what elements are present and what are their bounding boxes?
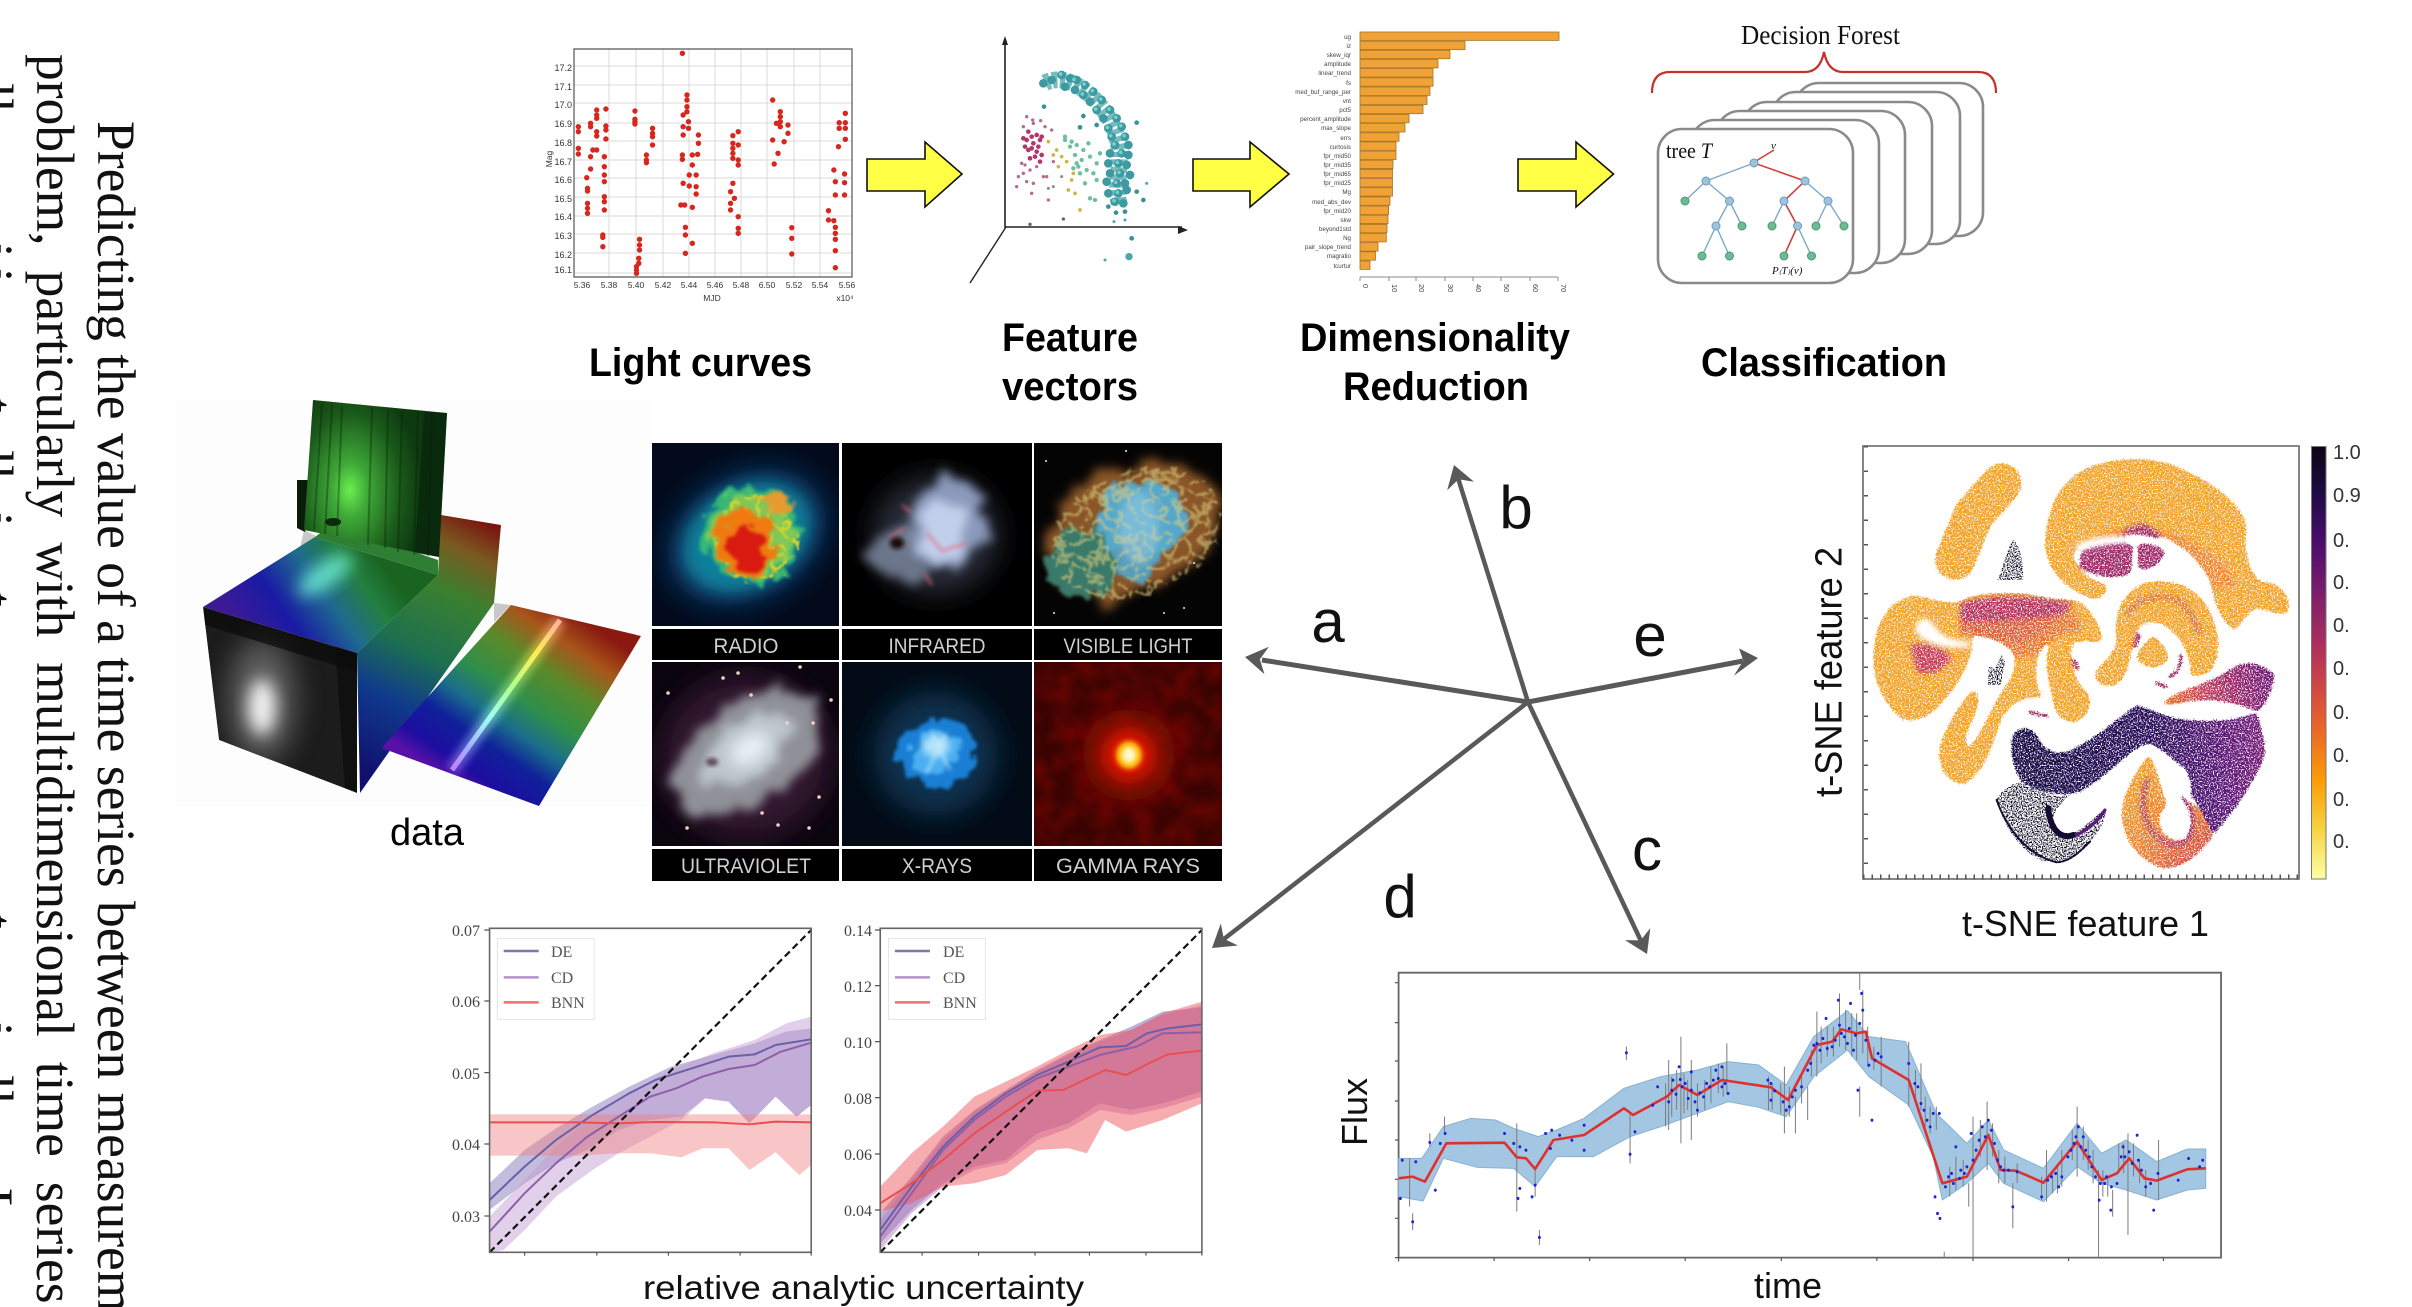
- panel: feature importance bar chart: 10: [1390, 284, 1399, 292]
- bar labels: fpr_mid25: [1323, 180, 1352, 187]
- panel: feature importance bar chart: 70: [1559, 284, 1568, 292]
- bar labels: fpr_mid65: [1323, 171, 1352, 178]
- bar labels: pct5: [1339, 107, 1352, 114]
- back dark slice: [297, 480, 313, 532]
- colour bar: 0.: [2333, 572, 2350, 594]
- colour bar: 0.: [2333, 615, 2350, 637]
- x axis tick labels: Mag: [544, 150, 554, 167]
- right plot bands and lines: [875, 928, 1202, 1256]
- right plot tick labels: [844, 923, 872, 1220]
- axis label: Flux: Flux: [1334, 1078, 1375, 1146]
- colour bar: 0.: [2333, 745, 2350, 767]
- tile: radio: RADIO: [714, 635, 778, 658]
- bar labels: fs: [1346, 80, 1351, 87]
- tree labels: P₍T₎(v): [1771, 265, 1803, 277]
- tile: gamma rays: GAMMA RAYS: [1056, 855, 1200, 878]
- bar labels: linear_trend: [1318, 70, 1352, 77]
- arrow c: [1528, 702, 1650, 954]
- tree edges: [1685, 163, 1844, 256]
- axis label: t-SNE feature 1: t-SNE feature 1: [1962, 903, 2209, 944]
- colour bar: 0.: [2333, 658, 2350, 680]
- green image slice: [304, 400, 447, 557]
- arrow letters: d: [1383, 863, 1417, 930]
- heading: Light curves: Light curves: [589, 341, 812, 385]
- tile: infrared: INFRARED: [888, 635, 986, 658]
- right plot tick labels: 0.14: [844, 923, 872, 940]
- legend labels: CD: [551, 970, 573, 987]
- y axis tick labels: 16.4: [554, 212, 572, 222]
- panel: feature importance bar chart: 0: [1361, 284, 1370, 288]
- left plot tick labels: 0.03: [452, 1209, 480, 1226]
- colour bar: 0.: [2333, 702, 2350, 724]
- colour bar: 0.: [2333, 789, 2350, 811]
- bar labels: skw: [1340, 217, 1352, 224]
- top face of cube: [203, 524, 438, 653]
- panel: 3D feature vectors scatter: [970, 36, 1188, 283]
- arrow d: [1212, 702, 1528, 948]
- y axis tick labels: 17.1: [554, 82, 572, 92]
- heading: Feature vectors: Feature: [1002, 316, 1138, 360]
- tile: visible light: VISIBLE LIGHT: [1064, 635, 1193, 658]
- bar labels: percent_amplitude: [1300, 116, 1352, 123]
- bar labels: max_slope: [1321, 125, 1352, 132]
- panel: stacked decision tree cards: [1658, 83, 1983, 283]
- bar labels: tcurtur: [1333, 263, 1351, 270]
- bar labels: iz: [1347, 43, 1351, 50]
- panel: feature importance bar chart: 60: [1531, 284, 1540, 292]
- red mean curve: [1399, 1029, 2206, 1183]
- y axis tick labels: [554, 63, 572, 275]
- dark edges of the black cluster: [1997, 800, 2105, 862]
- axis label: time: time: [1754, 1265, 1822, 1306]
- left plot tick labels: 0.05: [452, 1066, 480, 1083]
- panel: feature importance bar chart: [1295, 32, 1568, 292]
- blue observations: [1400, 993, 2203, 1238]
- legend labels: DE: [551, 944, 572, 961]
- right face of cube: [357, 515, 501, 793]
- tree labels: v: [1771, 140, 1776, 152]
- left plot tick labels: 0.04: [452, 1137, 480, 1154]
- arrow: light curves to feature vectors: [867, 142, 962, 207]
- x axis tick labels: 5.52: [786, 280, 803, 290]
- heading: Feature vectors: vectors: [1002, 365, 1138, 409]
- x axis tick labels: 5.44: [681, 280, 698, 290]
- red light curve points: [578, 53, 845, 273]
- left plot tick labels: 0.07: [452, 923, 480, 940]
- central arrows hub: [1212, 465, 1758, 954]
- bar labels: fpr_mid50: [1323, 153, 1352, 160]
- bar labels: med_buf_range_per: [1295, 89, 1351, 96]
- tile: x-rays: [842, 662, 1032, 881]
- tile: ultraviolet: ULTRAVIOLET: [681, 855, 811, 878]
- error bars: [1410, 973, 2159, 1258]
- arrow b: [1447, 465, 1528, 702]
- tile: gamma rays: [1034, 662, 1222, 881]
- arrow e: [1528, 648, 1758, 702]
- panel: feature importance bar chart: 50: [1502, 284, 1511, 292]
- x axis tick labels: 5.48: [733, 280, 750, 290]
- panel: multi-wavelength nebula grid: [643, 438, 1238, 881]
- bar labels: Mg: [1342, 189, 1352, 196]
- panel: feature importance bar chart: 40: [1474, 284, 1483, 292]
- arrow letters: c: [1632, 816, 1662, 883]
- bar labels: magratio: [1327, 253, 1352, 260]
- axis label: relative analytic uncertainty: relative analytic uncertainty: [643, 1269, 1085, 1306]
- arrow: feature vectors to dimensionality reduction: [1193, 142, 1289, 207]
- arrow a: [1245, 647, 1528, 702]
- orange and red clusters: [1873, 459, 2289, 868]
- text line 1: Predicting the value of a time series between measurem: [86, 121, 146, 1307]
- panel: feature importance bar chart: 20: [1417, 284, 1426, 292]
- x axis tick labels: x10⁴: [836, 293, 854, 303]
- bar labels: curtosis: [1330, 144, 1351, 151]
- y axis tick labels: 16.5: [554, 194, 572, 204]
- bar labels: pair_slope_trend: [1305, 244, 1352, 251]
- panel: uncertainty calibration plots: [452, 923, 1202, 1306]
- text line 2: problem, particularly with multidimensional time series: [25, 54, 85, 1304]
- arrow letters: b: [1499, 474, 1533, 541]
- x axis tick labels: 5.42: [655, 280, 672, 290]
- arrow letters: e: [1633, 602, 1667, 669]
- bar labels: fpr_mid35: [1323, 162, 1352, 169]
- legend labels: DE: [943, 944, 964, 961]
- colour bar: 0.: [2333, 831, 2350, 853]
- arrow letters: [1311, 474, 1667, 930]
- x axis tick labels: 6.50: [759, 280, 776, 290]
- right plot tick labels: 0.12: [844, 979, 872, 996]
- panel: multi-wavelength data cube: [175, 400, 652, 807]
- y axis tick labels: 17.0: [554, 100, 572, 110]
- x axis tick labels: 5.56: [839, 280, 856, 290]
- legend labels: BNN: [551, 995, 585, 1012]
- y axis tick labels: 16.7: [554, 157, 572, 167]
- bar labels: Ng: [1343, 235, 1352, 242]
- y axis tick labels: 17.2: [554, 63, 572, 73]
- panel: flux time series: [1334, 973, 2221, 1306]
- tree labels: tree T: [1666, 138, 1714, 163]
- y axis tick labels: 16.9: [554, 119, 572, 129]
- bracket: decision forest brace: [1652, 52, 1996, 93]
- heading: Classification: Classification: [1701, 341, 1947, 385]
- x axis tick labels: [544, 150, 856, 303]
- panel: t-SNE embedding plot: [1808, 442, 2361, 944]
- bar labels: errs: [1340, 135, 1351, 142]
- x axis tick labels: 5.46: [707, 280, 724, 290]
- left grayscale face: [203, 607, 357, 793]
- tree nodes: [1702, 159, 1832, 230]
- colour bar: 0.: [2333, 530, 2350, 552]
- bar labels: beyond1std: [1319, 226, 1352, 233]
- x axis tick labels: 5.40: [628, 280, 645, 290]
- dark purple clusters: [2011, 705, 2265, 835]
- right plot tick labels: 0.10: [844, 1035, 872, 1052]
- bar labels: fpr_mid20: [1323, 208, 1352, 215]
- left plot bands and lines: [484, 928, 811, 1256]
- bar labels: [1295, 34, 1352, 270]
- heading: Decision Forest: Decision Forest: [1741, 20, 1900, 50]
- tile: ultraviolet: [652, 662, 839, 881]
- bar labels: ug: [1344, 34, 1352, 41]
- right plot tick labels: 0.04: [844, 1203, 872, 1220]
- 3D axes: [970, 36, 1188, 283]
- tile: visible light: [1034, 443, 1222, 660]
- x axis tick labels: 5.36: [574, 280, 591, 290]
- label: data: data: [390, 812, 465, 854]
- arrow letters: a: [1311, 588, 1345, 655]
- y axis tick labels: 16.8: [554, 138, 572, 148]
- bar labels: vnt: [1343, 98, 1351, 105]
- colour bar: 0.9: [2333, 485, 2361, 507]
- value axis: [1360, 277, 1558, 281]
- bar labels: med_abs_dev: [1312, 199, 1352, 206]
- heading: Feature vectors: [1002, 316, 1138, 409]
- bar labels: amplitude: [1324, 61, 1352, 68]
- uncertainty band: [1399, 1011, 2206, 1202]
- y axis tick labels: 16.2: [554, 250, 572, 260]
- tile: infrared: [842, 443, 1032, 660]
- axis label: t-SNE feature 2: t-SNE feature 2: [1808, 547, 1850, 797]
- right plot tick labels: 0.06: [844, 1147, 872, 1164]
- heading: Dimensionality Reduction: Dimensionality: [1300, 316, 1571, 360]
- x axis tick labels: MJD: [703, 293, 721, 303]
- spectrum sheet: [382, 605, 641, 806]
- grey shadow pieces: [300, 530, 511, 622]
- legend labels: CD: [943, 970, 965, 987]
- x axis tick labels: 5.54: [812, 280, 829, 290]
- tile: radio: [652, 443, 839, 660]
- legend labels: [551, 944, 977, 1012]
- colour bar: 1.0: [2333, 442, 2361, 464]
- heading: Dimensionality Reduction: Reduction: [1343, 365, 1529, 409]
- x axis tick labels: 5.38: [601, 280, 618, 290]
- 3D scatter points: [1017, 74, 1147, 260]
- black speckled clusters: [1988, 540, 2106, 862]
- arrow: dimensionality reduction to classification: [1518, 142, 1614, 207]
- right plot tick labels: 0.08: [844, 1091, 872, 1108]
- panel: light curves scatter plot: [544, 49, 856, 303]
- tile: x-rays: X-RAYS: [902, 855, 972, 878]
- y axis tick labels: 16.3: [554, 231, 572, 241]
- body text rotated on the left edge: [0, 54, 146, 1307]
- left plot tick labels: [452, 923, 480, 1226]
- y axis tick labels: 16.1: [554, 265, 572, 275]
- frame and ticks: [1399, 973, 2221, 1258]
- plot frame: [1863, 446, 2299, 879]
- heading: Dimensionality Reduction: [1300, 316, 1571, 409]
- left plot tick labels: 0.06: [452, 994, 480, 1011]
- y axis tick labels: 16.6: [554, 175, 572, 185]
- bars: [1360, 32, 1559, 269]
- panel: feature importance bar chart: 30: [1446, 284, 1455, 292]
- bar labels: skew_iqr: [1327, 52, 1351, 59]
- colour bar: [2312, 442, 2361, 879]
- legend labels: BNN: [943, 995, 977, 1012]
- tree labels: [1666, 138, 1803, 277]
